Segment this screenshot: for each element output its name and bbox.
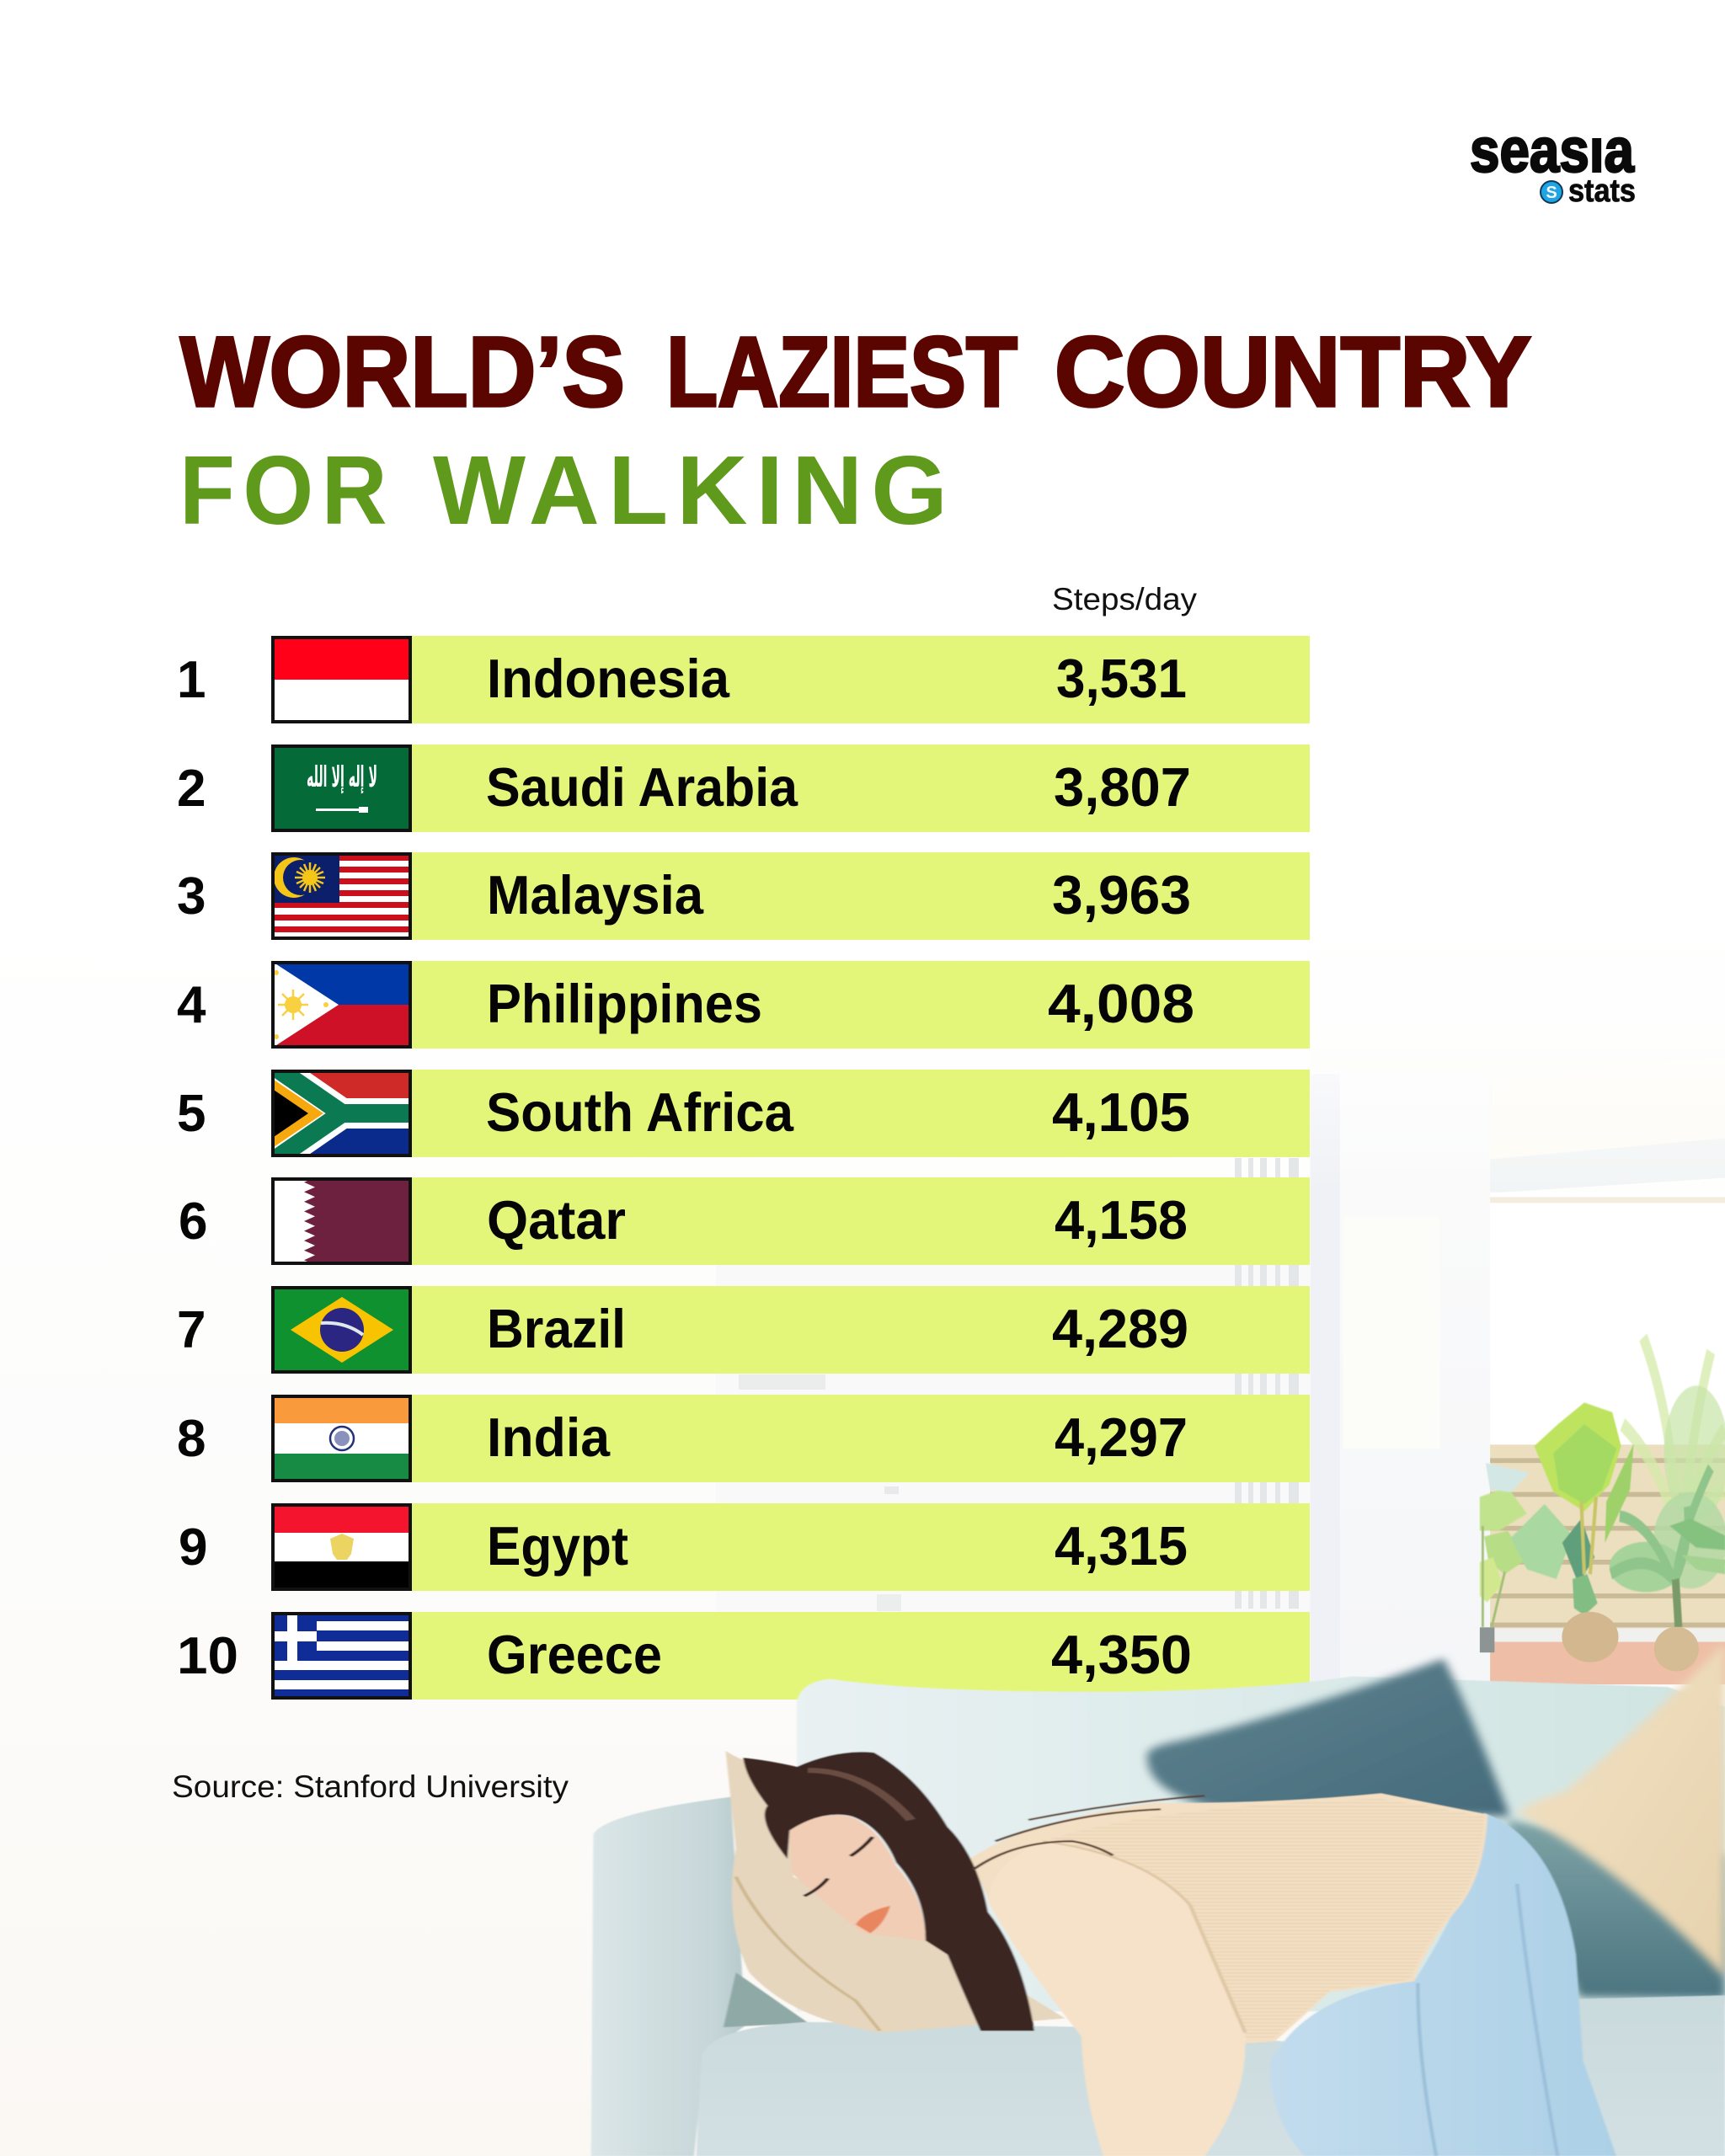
flag: Egypt: [271, 1503, 412, 1591]
row 8: India: [177, 1395, 1310, 1482]
shadow under pillow: [724, 1972, 808, 2027]
photo: woman asleep on a sofa: [591, 1643, 1725, 2156]
left plant: [1480, 1487, 1527, 1531]
row 3: Malaysia: 3: [177, 867, 206, 926]
title line 1: [180, 317, 1531, 428]
lips: [856, 1906, 890, 1934]
flag: Saudi Arabia: لا إله إلا الله: [307, 760, 377, 794]
row 4: Philippines: [177, 961, 1310, 1049]
pillow seam: [736, 1876, 880, 2031]
jeans seams: [1418, 1884, 1557, 2156]
row 2: Saudi Arabia: 3,807: [1054, 756, 1191, 818]
teal cushion: [1147, 1658, 1509, 1817]
logo: seasia stats: [1470, 115, 1636, 209]
palm back fronds: [1622, 1337, 1725, 1516]
title line 2: WALKING: [433, 435, 956, 545]
row 2: Saudi Arabia: [177, 744, 1310, 832]
row 7: Brazil: [177, 1286, 1310, 1374]
monstera: [1535, 1402, 1621, 1512]
row 7: Brazil: Brazil: [487, 1298, 626, 1359]
title line 1: COUNTRY: [1055, 317, 1531, 428]
row 10: Greece: 4,350: [1051, 1624, 1192, 1685]
beige cushion: [1517, 1643, 1725, 1977]
background photo: faded room with curtain, window and plants: [716, 914, 1725, 1684]
row 9: Egypt: [179, 1503, 1310, 1591]
palm front: [1610, 1468, 1711, 1579]
title line 1: LAZIEST: [666, 317, 1017, 428]
jeans: [1270, 1813, 1616, 2156]
row 4: Philippines: 4,008: [1048, 973, 1194, 1034]
row 4: Philippines: 4: [177, 976, 206, 1034]
flag: Greece: [271, 1612, 412, 1700]
row 1: Indonesia: Indonesia: [487, 648, 730, 709]
flag: Malaysia: [271, 852, 412, 940]
title line 2: [179, 435, 956, 545]
flag: Indonesia: [271, 636, 412, 723]
row 4: Philippines: Philippines: [487, 973, 762, 1034]
row 5: South Africa: 5: [177, 1085, 206, 1143]
flag: South Africa: [271, 1070, 412, 1157]
row 6: Qatar: [179, 1177, 1310, 1265]
row 7: Brazil: 4,289: [1052, 1298, 1188, 1359]
row 6: Qatar: Qatar: [487, 1189, 626, 1251]
flag: Qatar: [271, 1177, 412, 1265]
plants: [1480, 1337, 1725, 1627]
dark shade behind body: [1506, 1820, 1725, 1999]
row 3: Malaysia: 3,963: [1052, 864, 1191, 926]
flag: Brazil: [271, 1286, 412, 1374]
source note: Source: Stanford University: [172, 1769, 569, 1804]
long dark hair: [743, 1752, 1034, 2031]
sofa back: [797, 1676, 1725, 2011]
row 9: Egypt: 9: [179, 1518, 207, 1577]
row 2: Saudi Arabia: Saudi Arabia: [486, 756, 798, 818]
row 10: Greece: 10: [177, 1627, 238, 1685]
logo: seasia stats: seasia: [1470, 115, 1635, 185]
sofa armrest: [591, 1797, 745, 2156]
row 10: Greece: [177, 1612, 1310, 1700]
logo: seasia stats: S: [1546, 184, 1557, 202]
row 9: Egypt: 4,315: [1055, 1515, 1188, 1577]
column heading: steps per day: Steps/day: [1052, 582, 1198, 616]
row 1: Indonesia: 1: [177, 651, 206, 709]
closed eyes: [804, 1837, 873, 1896]
row 2: Saudi Arabia: 2: [177, 760, 206, 818]
seat cushion: [697, 1995, 1725, 2156]
row 6: Qatar: 6: [179, 1193, 207, 1251]
row 5: South Africa: 4,105: [1052, 1081, 1190, 1143]
stray hair strands: [974, 1796, 1204, 1870]
face: [789, 1815, 926, 1941]
row 8: India: 8: [177, 1410, 206, 1468]
title line 2: FOR: [179, 435, 395, 545]
flag: Saudi Arabia: [271, 744, 412, 832]
row 1: Indonesia: [177, 636, 1310, 723]
flag: India: [271, 1395, 412, 1482]
row 8: India: India: [487, 1406, 611, 1468]
baskets: [1562, 1612, 1618, 1662]
title line 1: WORLD’S: [180, 317, 625, 428]
row 5: South Africa: [179, 1070, 1310, 1157]
row 1: Indonesia: 3,531: [1056, 648, 1187, 709]
row 3: Malaysia: Malaysia: [487, 864, 704, 926]
ranking table: [177, 636, 1310, 1700]
row 10: Greece: Greece: [487, 1624, 662, 1685]
row 9: Egypt: Egypt: [487, 1515, 628, 1577]
logo: seasia stats: stats: [1568, 173, 1636, 209]
row 3: Malaysia: [177, 852, 1310, 940]
sweater torso: [969, 1793, 1487, 2043]
row 5: South Africa: South Africa: [486, 1081, 794, 1143]
flag: Philippines: [271, 961, 412, 1049]
sweater sleeve: [988, 1841, 1246, 2156]
row 6: Qatar: 4,158: [1055, 1189, 1188, 1251]
row 8: India: 4,297: [1055, 1406, 1188, 1468]
row 7: Brazil: 7: [177, 1301, 206, 1359]
head pillow: [725, 1751, 1065, 2032]
